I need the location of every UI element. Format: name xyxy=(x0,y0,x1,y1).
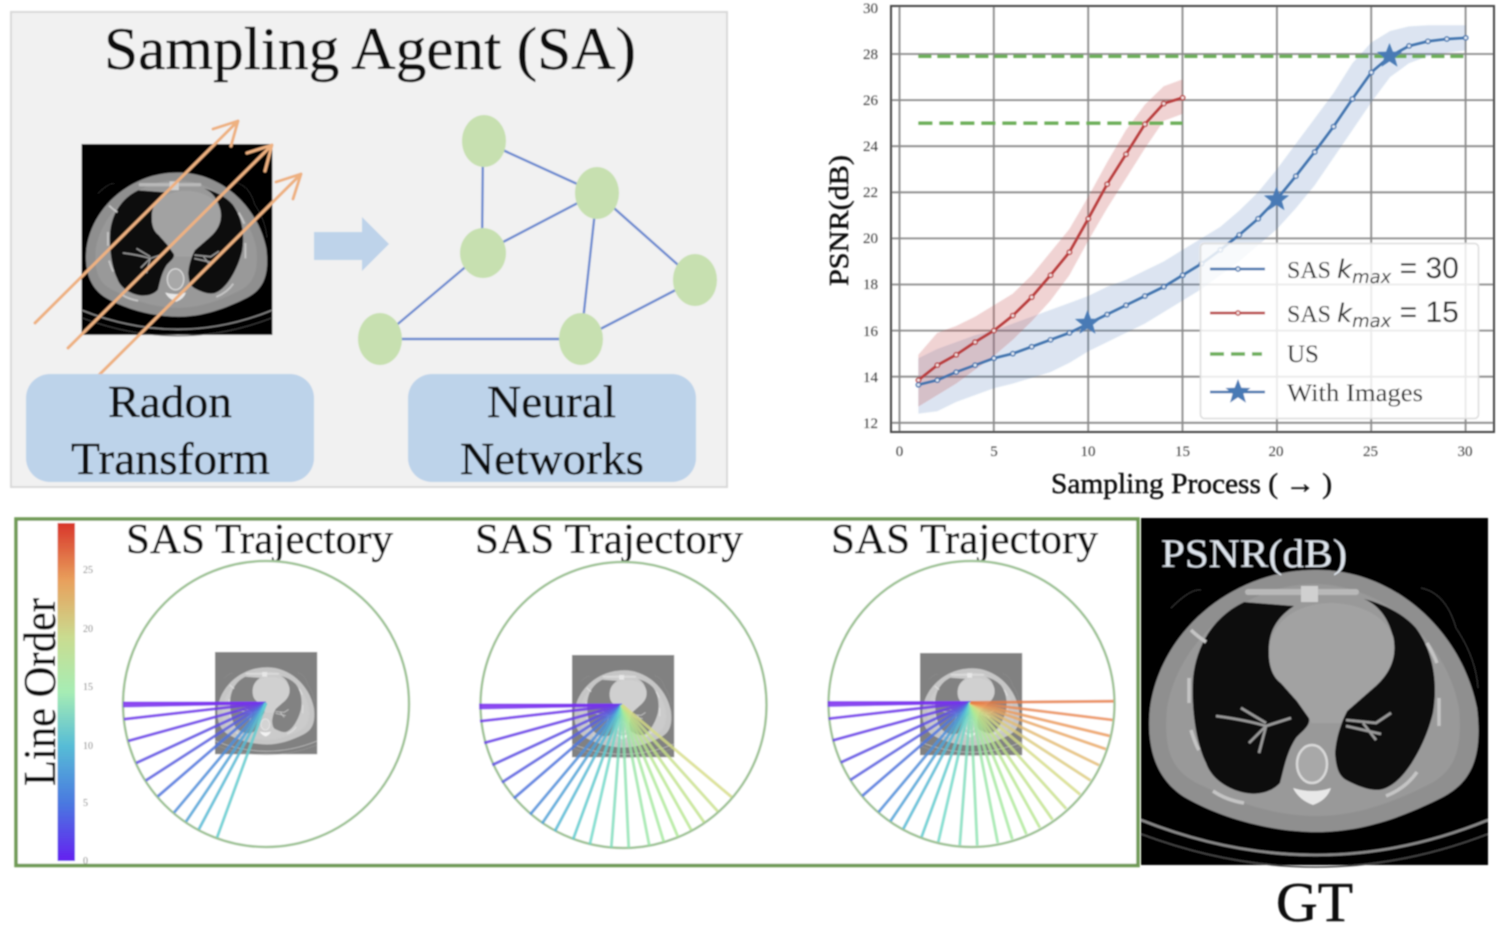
panel: sampling agent xyxy=(11,12,727,487)
line: kmax 15 xyxy=(918,98,1183,380)
trajectory 3 xyxy=(828,517,1114,847)
legend entry: kmax 30: = 30 xyxy=(1391,252,1459,285)
panel: SAS trajectories xyxy=(14,517,1138,867)
markers: kmax 15 xyxy=(918,98,1183,380)
x axis tick labels: 0 xyxy=(896,444,903,460)
grid and axes xyxy=(891,6,1494,432)
legend entry: kmax 15: = 15 xyxy=(1391,296,1459,329)
heading: trajectory 3: SAS Trajectory xyxy=(831,517,1098,563)
legend entry: kmax 30: max xyxy=(1352,267,1392,288)
legend entry: with images: With Images xyxy=(1287,380,1423,407)
star markers xyxy=(1075,43,1402,334)
x axis tick labels xyxy=(896,444,1472,460)
colorbar: line order xyxy=(58,523,93,867)
markers: kmax 30 xyxy=(918,38,1466,385)
label: neural networks: Neural xyxy=(487,376,616,427)
x axis tick labels: 5 xyxy=(990,444,998,460)
band: kmax 15 xyxy=(918,79,1183,407)
y axis tick labels: 18 xyxy=(863,277,878,293)
legend entry: US: US xyxy=(1287,341,1319,368)
colorbar: line order: 5 xyxy=(83,798,88,809)
label: neural networks xyxy=(408,374,696,484)
label: radon transform xyxy=(26,374,314,484)
trajectory 1 xyxy=(123,517,409,847)
label: PSNR on CT: PSNR(dB) xyxy=(1161,531,1347,576)
colorbar: line order: 15 xyxy=(83,682,93,693)
x axis tick labels: 30 xyxy=(1458,444,1472,460)
legend entry: kmax 15: max xyxy=(1352,311,1392,332)
y axis tick labels xyxy=(863,1,878,432)
y axis tick labels: 20 xyxy=(863,231,878,247)
legend entry: kmax 30 xyxy=(1210,252,1459,288)
arrow: block arrow to network xyxy=(314,217,389,271)
heading: trajectory 1: SAS Trajectory xyxy=(126,517,393,563)
colorbar: line order: 10 xyxy=(83,741,93,752)
y axis tick labels: 30 xyxy=(863,1,878,17)
x axis tick labels: 20 xyxy=(1268,444,1284,460)
y axis tick labels: 14 xyxy=(863,370,878,386)
x axis tick labels: 10 xyxy=(1080,444,1096,460)
image: CT scan with projection arrows xyxy=(35,121,301,377)
label: radon transform: Transform xyxy=(71,433,270,484)
y axis tick labels: 24 xyxy=(863,139,878,155)
y axis tick labels: 28 xyxy=(863,47,878,63)
x axis tick labels: 15 xyxy=(1175,444,1190,460)
line: kmax 30 xyxy=(918,38,1466,385)
heading: sampling agent: Sampling Agent (SA) xyxy=(104,16,636,82)
colorbar: line order: 25 xyxy=(83,565,93,576)
colorbar: line order: 20 xyxy=(83,624,93,635)
x axis tick labels: 25 xyxy=(1363,444,1378,460)
image: ground truth CT xyxy=(1141,518,1488,867)
legend xyxy=(1200,244,1478,418)
label: line order: Line Order xyxy=(14,598,65,786)
label: neural networks: Networks xyxy=(460,433,644,484)
legend entry: US xyxy=(1210,341,1319,368)
band: kmax 30 xyxy=(918,25,1466,414)
dashed US lines xyxy=(918,56,1466,123)
y axis tick labels: 12 xyxy=(863,416,878,432)
label: radon transform: Radon xyxy=(108,376,232,427)
y axis tick labels: 26 xyxy=(863,93,878,109)
y axis tick labels: 16 xyxy=(863,324,878,340)
y axis tick labels: 22 xyxy=(863,185,878,201)
legend entry: kmax 30: SAS k xyxy=(1287,255,1352,285)
diagram: neural network nodes and edges xyxy=(358,115,717,365)
label: GT: GT xyxy=(1276,872,1353,934)
legend entry: kmax 15 xyxy=(1210,296,1459,332)
trajectory 2 xyxy=(475,517,766,848)
legend entry: kmax 15: SAS k xyxy=(1287,299,1352,329)
data series xyxy=(918,25,1466,414)
chart: PSNR vs sampling process xyxy=(824,1,1494,500)
legend entry: with images xyxy=(1210,379,1423,407)
colorbar: line order: 0 xyxy=(83,856,88,867)
x axis title: Sampling Process ( → ) xyxy=(1051,468,1332,500)
heading: trajectory 2: SAS Trajectory xyxy=(475,517,743,563)
y axis title: PSNR(dB) xyxy=(824,155,854,286)
